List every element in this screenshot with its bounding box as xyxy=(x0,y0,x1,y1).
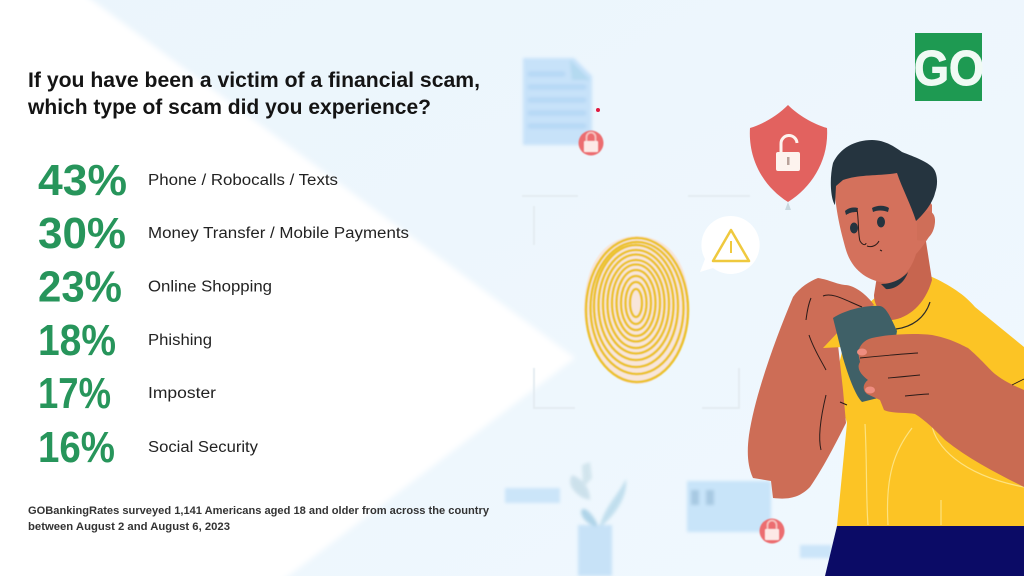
chin shadow xyxy=(881,272,908,289)
shirt fold lines xyxy=(865,424,1024,525)
stat: money transfer: Money Transfer / Mobile Payments xyxy=(148,225,409,242)
white triangle panel xyxy=(0,0,575,576)
shirt xyxy=(835,276,1024,526)
stat: social security: Social Security xyxy=(148,439,258,456)
title: which type of scam did you experience? xyxy=(27,96,431,119)
faded bars xyxy=(505,488,832,558)
hair xyxy=(831,140,937,221)
icon: fingerprint xyxy=(584,236,689,384)
title: If you have been a victim of a financial scam, xyxy=(28,69,480,92)
icon: shield with open lock xyxy=(750,105,827,210)
stat: phone robocalls texts: Phone / Robocalls / Texts xyxy=(148,172,338,189)
stat: phone robocalls texts: 43% xyxy=(38,156,127,205)
neck xyxy=(874,235,932,320)
ear xyxy=(917,211,935,241)
faint scan frame xyxy=(522,196,750,408)
stat: money transfer: 30% xyxy=(38,209,126,258)
source note: between August 2 and August 6, 2023 xyxy=(28,521,230,533)
source note: GOBankingRates surveyed 1,141 Americans aged 18 and older from across the country xyxy=(28,505,490,517)
stat: imposter: 17% xyxy=(38,369,111,418)
left arm and hand xyxy=(748,278,874,499)
head xyxy=(834,160,932,283)
trousers xyxy=(825,526,1024,576)
stat: phishing xyxy=(38,316,212,365)
right hand and arm xyxy=(858,334,1024,487)
credit card xyxy=(687,481,771,532)
icon: small lock on document xyxy=(578,130,604,156)
stat: phishing: Phishing xyxy=(148,332,212,349)
icon: small lock on card xyxy=(760,518,784,544)
hand crease lines xyxy=(806,295,862,450)
phone xyxy=(833,306,897,402)
decorative plant and vase xyxy=(570,462,626,576)
stat: online shopping xyxy=(38,262,272,312)
sleeve glimpse xyxy=(823,330,843,348)
stat: social security xyxy=(38,423,258,472)
finger lines xyxy=(860,353,1024,396)
icon: warning bubble xyxy=(700,216,760,274)
stat: phishing: 18% xyxy=(38,316,116,365)
logo: GO xyxy=(914,42,984,96)
stat: phone robocalls texts xyxy=(38,156,338,205)
stat: money transfer xyxy=(38,209,409,258)
collar line xyxy=(896,302,930,329)
stat: online shopping: Online Shopping xyxy=(148,278,272,296)
eyes and brows xyxy=(845,206,889,234)
stat: online shopping: 23% xyxy=(38,262,122,312)
illustration: man with phone xyxy=(748,140,1024,576)
nose and mouth xyxy=(857,209,882,251)
fingernails xyxy=(857,348,875,394)
stat: social security: 16% xyxy=(38,423,115,472)
stat: imposter xyxy=(38,369,216,418)
stat: imposter: Imposter xyxy=(148,385,216,402)
red dot xyxy=(596,108,600,112)
icon: document xyxy=(523,58,592,145)
